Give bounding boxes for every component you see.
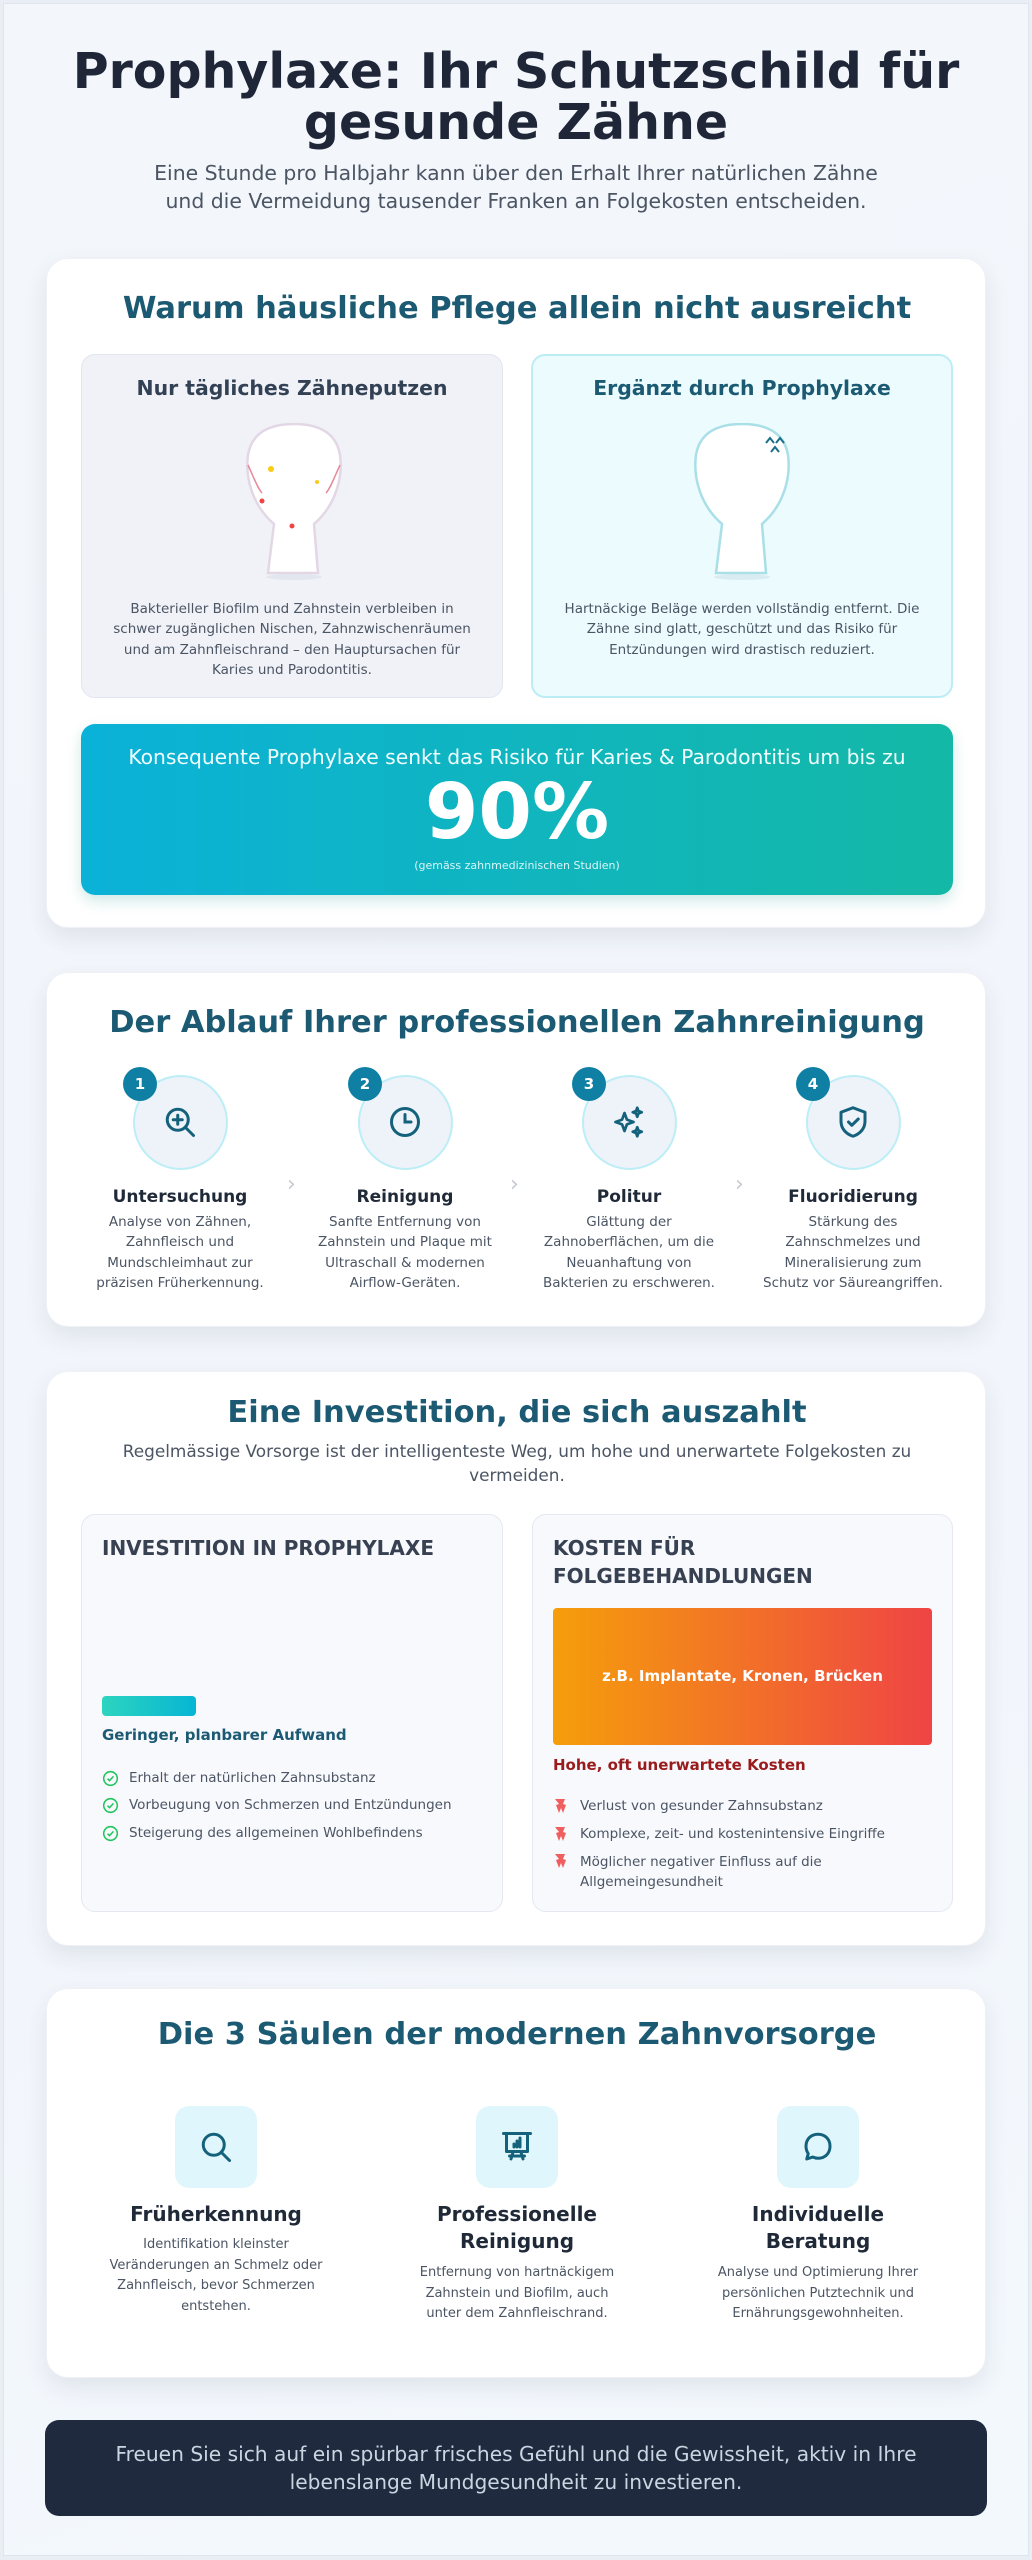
pillar 2 bbox=[420, 2106, 614, 2321]
pillar 1: Veränderungen an Schmelz oder bbox=[110, 2258, 322, 2273]
step 3: Neuanhaftung von bbox=[566, 1255, 692, 1271]
step 3: Politur bbox=[597, 1187, 661, 1207]
pillar 1 bbox=[110, 2106, 322, 2314]
pillar 2: Entfernung von hartnäckigem bbox=[420, 2265, 614, 2280]
subpanel: prophylaxis investment: INVESTITION IN PROPHYLAXE bbox=[102, 1536, 434, 1560]
arrow 2: › bbox=[510, 1172, 519, 1197]
subpanel: follow-up costs bbox=[532, 1514, 953, 1912]
footer callout: Freuen Sie sich auf ein spürbar frisches Gefühl und die Gewissheit, aktiv in Ihre bbox=[115, 2442, 917, 2466]
risks list: Allgemeingesundheit bbox=[580, 1874, 723, 1890]
footer callout bbox=[45, 2420, 987, 2516]
subpanel: only brushing bbox=[81, 354, 503, 698]
pillar 3: persönlichen Putztechnik und bbox=[722, 2286, 914, 2301]
step 3: 3 bbox=[584, 1075, 594, 1093]
icon: tooth with plaque bbox=[246, 423, 342, 580]
footer callout: lebenslange Mundgesundheit zu investieren. bbox=[290, 2470, 742, 2494]
subpanel: prophylaxis investment bbox=[81, 1514, 503, 1912]
subtitle bbox=[154, 161, 878, 213]
subheading: Nur tägliches Zähneputzen bbox=[137, 376, 447, 400]
step 1: Zahnfleisch und bbox=[126, 1234, 234, 1250]
subtitle: und die Vermeidung tausender Franken an Folgekosten entscheiden. bbox=[165, 189, 867, 213]
icon: shield check bbox=[840, 1106, 866, 1138]
pillar 3: Analyse und Optimierung Ihrer bbox=[718, 2265, 918, 2280]
step 1 bbox=[96, 1067, 264, 1291]
subpanel: prophylaxis investment: Geringer, planbarer Aufwand bbox=[102, 1726, 347, 1744]
step 2: Reinigung bbox=[357, 1187, 453, 1207]
icon: search bbox=[202, 2132, 232, 2162]
pillar 3 bbox=[718, 2106, 918, 2321]
bar: high cost: z.B. Implantate, Kronen, Brücken bbox=[602, 1667, 883, 1685]
step 1: 1 bbox=[135, 1075, 145, 1093]
step 4: Fluoridierung bbox=[788, 1187, 918, 1207]
text: biofilm remains: schwer zugänglichen Nischen, Zahnzwischenräumen bbox=[113, 621, 471, 637]
subheading: Ergänzt durch Prophylaxe bbox=[593, 376, 891, 400]
subpanel: follow-up costs: KOSTEN FÜR bbox=[553, 1536, 695, 1560]
benefits list bbox=[102, 1770, 452, 1842]
risks list bbox=[555, 1798, 885, 1890]
text: biofilm remains bbox=[113, 601, 471, 678]
step 2: Zahnstein und Plaque mit bbox=[318, 1234, 492, 1250]
heading: Warum häusliche Pflege: Warum häusliche Pflege allein nicht ausreicht bbox=[123, 291, 911, 326]
step 3: Glättung der bbox=[586, 1214, 672, 1230]
text: biofilm remains: und am Zahnfleischrand – den Hauptursachen für bbox=[124, 642, 460, 658]
subtitle: Eine Stunde pro Halbjahr kann über den Erhalt Ihrer natürlichen Zähne bbox=[154, 161, 878, 185]
benefits list: Steigerung des allgemeinen Wohlbefindens bbox=[129, 1825, 423, 1841]
pillar 2: unter dem Zahnfleischrand. bbox=[426, 2306, 608, 2321]
bar: high cost bbox=[553, 1608, 932, 1745]
callout: 90% risk reduction bbox=[81, 724, 953, 895]
step 4: Mineralisierung zum bbox=[784, 1255, 922, 1271]
arrow 3: › bbox=[735, 1172, 744, 1197]
title: gesunde Zähne bbox=[304, 94, 728, 151]
risks list: Verlust von gesunder Zahnsubstanz bbox=[580, 1798, 823, 1814]
risks list: Möglicher negativer Einfluss auf die bbox=[580, 1854, 822, 1870]
text: deposits removed bbox=[565, 601, 919, 658]
bar: small cost bbox=[102, 1696, 196, 1716]
step 4: Stärkung des bbox=[808, 1214, 897, 1230]
intro text bbox=[123, 1441, 911, 1485]
pillar 2: Reinigung bbox=[460, 2229, 574, 2253]
step 1: Analyse von Zähnen, bbox=[109, 1214, 251, 1230]
pillar 2: Zahnstein und Biofilm, auch bbox=[426, 2286, 608, 2301]
icon: chat bubble bbox=[804, 2132, 832, 2160]
benefits list: Erhalt der natürlichen Zahnsubstanz bbox=[129, 1770, 376, 1786]
icon: presentation board bbox=[502, 2132, 532, 2160]
panel: why home care is not enough bbox=[46, 258, 986, 928]
step 2 bbox=[318, 1067, 492, 1291]
step 2: 2 bbox=[360, 1075, 370, 1093]
pillar 1: Früherkennung bbox=[130, 2202, 302, 2226]
pillar 1: Identifikation kleinster bbox=[143, 2237, 289, 2252]
step 4 bbox=[763, 1067, 943, 1291]
icon: zoom bbox=[166, 1108, 196, 1138]
step 3: Bakterien zu erschweren. bbox=[543, 1275, 715, 1291]
subpanel: follow-up costs: FOLGEBEHANDLUNGEN bbox=[553, 1564, 813, 1588]
pillar 3: Individuelle bbox=[752, 2202, 884, 2226]
intro text: vermeiden. bbox=[469, 1465, 565, 1485]
pillar 1: Zahnfleisch, bevor Schmerzen bbox=[117, 2278, 315, 2293]
step 1: Untersuchung bbox=[113, 1187, 247, 1207]
step 4: 4 bbox=[808, 1075, 818, 1093]
callout: 90% risk reduction: (gemäss zahnmedizinischen Studien) bbox=[414, 859, 620, 872]
panel: treatment process bbox=[46, 972, 986, 1327]
subpanel: with prophylaxis bbox=[531, 354, 953, 698]
callout: 90% risk reduction: Konsequente Prophylaxe senkt das Risiko für Karies & Parodontitis um bis zu bbox=[128, 745, 906, 769]
step 2: Sanfte Entfernung von bbox=[329, 1214, 481, 1230]
step 1: Mundschleimhaut zur bbox=[107, 1255, 253, 1271]
icon: sparkles bbox=[614, 1106, 644, 1138]
heading: Die 3 Säulen: Die 3 Säulen der modernen Zahnvorsorge bbox=[158, 2017, 876, 2052]
step 4: Schutz vor Säureangriffen. bbox=[763, 1275, 943, 1291]
step 3 bbox=[543, 1067, 715, 1291]
benefits list: Vorbeugung von Schmerzen und Entzündungen bbox=[129, 1797, 452, 1813]
title bbox=[73, 43, 960, 151]
text: deposits removed: Zähne sind glatt, geschützt und das Risiko für bbox=[587, 621, 897, 637]
big number: 90% bbox=[425, 768, 609, 857]
text: deposits removed: Hartnäckige Beläge werden vollständig entfernt. Die bbox=[565, 601, 919, 617]
pillar 2: Professionelle bbox=[437, 2202, 597, 2226]
risks list: Komplexe, zeit- und kostenintensive Eingriffe bbox=[580, 1826, 885, 1842]
heading: Der Ablauf: Der Ablauf Ihrer professionellen Zahnreinigung bbox=[109, 1005, 925, 1040]
step 2: Ultraschall & modernen bbox=[325, 1255, 485, 1271]
step 1: präzisen Früherkennung. bbox=[96, 1275, 264, 1291]
panel: investment bbox=[46, 1371, 986, 1946]
panel: three pillars bbox=[46, 1988, 986, 2378]
arrow 1: › bbox=[287, 1172, 296, 1197]
pillar 3: Beratung bbox=[766, 2229, 870, 2253]
step 4: Zahnschmelzes und bbox=[785, 1234, 921, 1250]
intro text: Regelmässige Vorsorge ist der intelligenteste Weg, um hohe und unerwartete Folgekosten zu bbox=[123, 1441, 911, 1461]
heading: Eine Investition: Eine Investition, die sich auszahlt bbox=[227, 1395, 807, 1430]
title: Prophylaxe: Ihr Schutzschild für bbox=[73, 43, 959, 100]
pillar 3: Ernährungsgewohnheiten. bbox=[732, 2306, 904, 2321]
text: biofilm remains: Bakterieller Biofilm und Zahnstein verbleiben in bbox=[130, 601, 454, 617]
subpanel: follow-up costs: Hohe, oft unerwartete Kosten bbox=[553, 1756, 806, 1774]
text: deposits removed: Entzündungen wird drastisch reduziert. bbox=[609, 642, 875, 658]
text: biofilm remains: Karies und Parodontitis. bbox=[212, 662, 372, 678]
step 2: Airflow-Geräten. bbox=[350, 1275, 460, 1291]
step 3: Zahnoberflächen, um die bbox=[544, 1234, 714, 1250]
pillar 1: entstehen. bbox=[181, 2299, 251, 2314]
icon: clean tooth bbox=[694, 423, 790, 580]
icon: clock bbox=[390, 1107, 420, 1137]
